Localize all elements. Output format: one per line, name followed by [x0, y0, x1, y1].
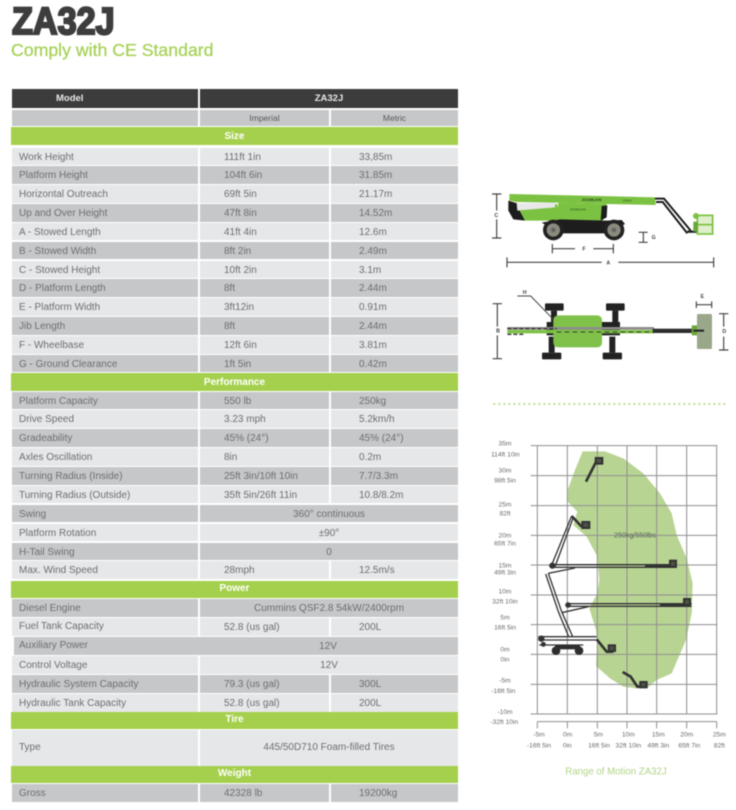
height axis labels: 98ft 5in: [494, 477, 516, 484]
row: max wind speed: 28mph: [224, 565, 255, 576]
height axis labels: 16ft 5in: [494, 625, 516, 632]
row: platform capacity: 550 lb: [224, 396, 251, 406]
dimension letters: side view: A: [606, 261, 610, 267]
height axis labels: -32ft 10in: [490, 719, 519, 726]
row: stowed width: B - Stowed Width: [19, 246, 96, 257]
row: platform capacity: [12, 392, 458, 410]
boom positions: [538, 458, 692, 687]
table header: ZA32J: [200, 89, 458, 108]
height axis labels: -16ft 5in: [491, 688, 516, 695]
band: size: [11, 127, 458, 145]
dimension letters: top view: D: [722, 329, 726, 335]
sub-header imperial: [200, 110, 329, 126]
row: stowed length: 41ft 4in: [224, 227, 257, 238]
boom pose: horizontal at 15m: [548, 561, 677, 573]
reach axis labels: 82ft: [714, 742, 725, 749]
row: hydraulic system capacity: [12, 674, 458, 694]
row: hydraulic tank capacity: 52.8 (us gal): [224, 698, 280, 709]
row: tire type: Type: [19, 742, 41, 753]
row: turning radius inside: Turning Radius (Inside): [19, 471, 123, 482]
row: control voltage: [12, 656, 458, 674]
row: wheelbase: 12ft 6in: [224, 340, 257, 351]
row: turning radius inside: 7.7/3.3m: [359, 471, 398, 482]
row: work height: [12, 148, 458, 165]
row: platform capacity: 250kg: [359, 396, 386, 406]
reach axis labels: 49ft 3in: [647, 742, 670, 749]
title: ZA32J: [12, 1, 115, 43]
dimension marks: side view: [492, 194, 714, 267]
row: stowed width: 8ft 2in: [224, 246, 251, 257]
row: gradeability: [12, 428, 458, 448]
row: turning radius outside: [12, 486, 458, 503]
row: platform length: D - Platform Length: [19, 283, 106, 294]
working range envelope: [568, 451, 693, 688]
row: turning radius inside: 25ft 3in/10ft 10in: [224, 471, 298, 482]
row: hydraulic system capacity: Hydraulic System Capacity: [19, 679, 138, 690]
section: power: [10, 580, 459, 712]
reach axis labels: 65ft 7in: [678, 742, 701, 749]
row: max wind speed: [12, 561, 458, 579]
band: size: Size: [224, 131, 244, 142]
row: hydraulic system capacity: 300L: [359, 679, 381, 690]
dimension letters: side view: C: [494, 213, 498, 219]
row: hydraulic tank capacity: [12, 694, 458, 712]
row: gradeability: Gradeability: [19, 433, 72, 444]
chart grid: [531, 446, 717, 728]
row: h-tail swing: H-Tail Swing: [19, 546, 75, 558]
row: work height: 33,85m: [359, 152, 392, 162]
height axis labels: 49ft 3in: [494, 570, 516, 577]
row: stowed width: [12, 242, 458, 260]
band: performance: [11, 373, 458, 391]
side view of machine: ZOOMLION: [582, 198, 602, 202]
row: stowed height: 10ft 2in: [224, 265, 257, 276]
row: stowed height: C - Stowed Height: [19, 265, 100, 276]
band: power: Power: [219, 583, 250, 594]
row: platform height: 104ft 6in: [224, 170, 262, 181]
row: up and over height: 47ft 8in: [224, 208, 257, 219]
reach axis labels: 20m: [680, 731, 694, 738]
row: diesel engine: Diesel Engine: [19, 603, 81, 614]
row: gross weight: Gross: [19, 788, 46, 799]
height axis labels: 25m: [499, 501, 512, 508]
row: h-tail swing: [12, 542, 458, 560]
row: gradeability: 45% (24°): [359, 433, 404, 444]
sub-header blank cell: [12, 110, 198, 126]
band: performance: Performance: [204, 377, 265, 388]
row: platform length: 2.44m: [359, 283, 387, 294]
reach axis labels: 25m: [713, 731, 726, 738]
reach axis labels: 0m: [563, 731, 573, 738]
row: gross weight: 19200kg: [359, 788, 397, 799]
height axis labels: 10m: [499, 588, 512, 595]
boom pose: maximum height: [586, 458, 602, 482]
row: platform capacity: Platform Capacity: [19, 396, 98, 406]
sub-header imperial: Imperial: [249, 113, 280, 123]
dimension letters: side view: G: [652, 235, 656, 241]
height axis labels: [490, 441, 520, 726]
row: control voltage: 12V: [320, 660, 338, 671]
height axis labels: 32ft 10in: [492, 598, 518, 605]
row: hydraulic tank capacity: Hydraulic Tank Capacity: [19, 698, 126, 709]
row: horizontal outreach: 21.17m: [359, 189, 392, 200]
row: stowed height: [12, 261, 458, 278]
boom pose: up and over: [552, 516, 589, 567]
row: drive speed: Drive Speed: [19, 414, 74, 425]
reach axis labels: 15m: [652, 731, 665, 738]
row: fuel tank capacity: 52.8 (us gal): [224, 622, 280, 633]
row: auxiliary power: 12V: [319, 641, 337, 652]
range of motion chart: [490, 440, 726, 778]
reach axis labels: [527, 731, 726, 749]
side view of machine: ZA32J: [623, 199, 632, 203]
row: fuel tank capacity: Fuel Tank Capacity: [19, 621, 104, 632]
band: tire: [11, 712, 458, 728]
row: tire type: [12, 730, 458, 766]
row: ground clearance: G - Ground Clearance: [19, 359, 117, 370]
subtitle: Comply with CE Standard: [11, 40, 214, 60]
section: performance: [10, 372, 459, 579]
row: fuel tank capacity: [12, 618, 458, 636]
row: diesel engine: [12, 598, 458, 618]
row: platform width: E - Platform Width: [19, 302, 100, 313]
capacity label: 250kg/550lbs: [614, 533, 656, 540]
row: wheelbase: F - Wheelbase: [19, 340, 84, 351]
row: platform length: [12, 278, 458, 298]
row: platform height: 31.85m: [359, 170, 392, 181]
row: platform rotation: ±90°: [319, 528, 339, 539]
row: up and over height: 14.52m: [359, 208, 392, 219]
row: axles oscillation: 8in: [224, 452, 237, 463]
row: diesel engine: Cummins QSF2.8 54kW/2400rpm: [254, 603, 404, 614]
row: axles oscillation: Axles Oscillation: [19, 452, 92, 463]
row: horizontal outreach: Horizontal Outreach: [19, 189, 108, 200]
sub-header metric: Metric: [383, 113, 406, 123]
row: platform rotation: [12, 524, 458, 541]
row: fuel tank capacity: 200L: [359, 622, 381, 633]
height axis labels: 0in: [501, 656, 510, 663]
row: platform height: [12, 166, 458, 184]
reach axis labels: 10m: [622, 731, 635, 738]
boom pose: below ground: [623, 672, 647, 687]
row: horizontal outreach: 69ft 5in: [224, 189, 257, 200]
height axis labels: 114ft 10in: [491, 451, 520, 458]
row: platform rotation: Platform Rotation: [19, 528, 96, 539]
band: tire: Tire: [225, 714, 244, 725]
row: jib length: 8ft: [224, 321, 235, 332]
row: stowed length: 12.6m: [359, 227, 387, 238]
height axis labels: 30m: [499, 467, 512, 474]
row: h-tail swing: 0: [326, 546, 332, 558]
reach axis labels: 5m: [594, 731, 603, 738]
band: weight: [11, 766, 458, 782]
chart caption: Range of Motion ZA32J: [565, 767, 667, 778]
boom pose: horizontal at 10m: [562, 599, 692, 613]
row: gross weight: 42328 lb: [224, 788, 262, 799]
row: gradeability: 45% (24°): [224, 433, 269, 444]
row: auxiliary power: Auxiliary Power: [19, 640, 88, 651]
row: platform width: [12, 298, 458, 316]
lower arm linkage: [546, 573, 573, 637]
height axis labels: 5m: [500, 615, 510, 622]
row: ground clearance: 1ft 5in: [224, 359, 251, 370]
section: tire: [10, 711, 459, 766]
dimension marks: top view: [493, 296, 728, 359]
height axis labels: 35m: [499, 441, 512, 448]
boom pose: stowed with jib down: [538, 636, 615, 652]
row: axles oscillation: [12, 448, 458, 466]
row: turning radius outside: 10.8/8.2m: [359, 490, 403, 501]
row: drive speed: 3.23 mph: [224, 414, 266, 425]
dimension letters: top view: [496, 290, 726, 335]
row: hydraulic system capacity: 79.3 (us gal): [224, 679, 280, 690]
row: platform width: 0.91m: [359, 302, 387, 313]
row: platform width: 3ft12in: [224, 302, 254, 313]
side view of machine: ZOOMLION: [570, 208, 586, 212]
dimension letters: side view: F: [582, 247, 586, 253]
row: tire type: 445/50D710 Foam-filled Tires: [263, 742, 395, 753]
machine chassis: [552, 645, 583, 655]
height axis labels: -10m: [497, 709, 513, 716]
row: auxiliary power: [14, 636, 458, 656]
height axis labels: -5m: [499, 677, 511, 684]
row: turning radius outside: Turning Radius (Outside): [19, 490, 130, 501]
reach axis labels: -16ft 5in: [527, 742, 551, 749]
machine dimension drawings: [491, 192, 729, 406]
row: jib length: [12, 316, 458, 336]
row: work height: Work Height: [19, 152, 74, 162]
row: hydraulic tank capacity: 200L: [359, 698, 381, 709]
height axis labels: 20m: [499, 532, 512, 539]
dimension letters: top view: E: [701, 294, 705, 300]
row: control voltage: Control Voltage: [19, 660, 87, 671]
row: horizontal outreach: [12, 185, 458, 203]
specification table: [10, 88, 459, 802]
band: weight: Weight: [218, 768, 251, 779]
row: axles oscillation: 0.2m: [359, 452, 381, 463]
row: platform height: Platform Height: [19, 170, 88, 181]
dimension letters: side view: [494, 213, 656, 267]
dimension letters: top view: B: [496, 329, 500, 335]
reach axis labels: 16ft 5in: [588, 742, 610, 749]
sub-header metric: [331, 110, 458, 126]
row: stowed length: [12, 223, 458, 240]
row: wheelbase: 3.81m: [359, 340, 387, 351]
table header: ZA32J: ZA32J: [315, 93, 343, 104]
section: size: [10, 126, 459, 372]
row: platform length: 8ft: [224, 283, 235, 294]
row: up and over height: [12, 204, 458, 222]
row: wheelbase: [12, 336, 458, 354]
row: turning radius outside: 35ft 5in/26ft 11in: [224, 490, 297, 501]
row: stowed width: 2.49m: [359, 246, 387, 257]
dimension letters: top view: H: [523, 290, 527, 296]
row: drive speed: 5.2km/h: [359, 414, 395, 425]
dotted divider: [493, 402, 728, 406]
reach axis labels: 32ft 10in: [616, 742, 641, 749]
row: drive speed: [12, 410, 458, 428]
row: work height: 111ft 1in: [224, 152, 261, 162]
band: power: [11, 581, 458, 598]
row: stowed length: A - Stowed Length: [19, 227, 101, 238]
row: gross weight: [12, 784, 458, 802]
row: swing: Swing: [19, 509, 46, 520]
height axis labels: 0m: [500, 646, 510, 653]
row: ground clearance: 0.42m: [359, 359, 387, 370]
reach axis labels: -5m: [533, 731, 545, 738]
reach axis labels: 0in: [563, 742, 572, 749]
section: weight: [10, 765, 459, 802]
top view of machine: [507, 303, 712, 359]
height axis labels: 65ft 7in: [494, 541, 516, 548]
height axis labels: 82ft: [499, 511, 511, 518]
row: max wind speed: 12.5m/s: [359, 565, 395, 576]
row: jib length: Jib Length: [19, 321, 65, 332]
row: swing: [12, 504, 458, 522]
table header: model: [12, 89, 198, 108]
row: stowed height: 3.1m: [359, 265, 381, 276]
row: swing: 360° continuous: [293, 509, 365, 520]
row: up and over height: Up and Over Height: [19, 208, 107, 219]
height axis labels: 15m: [499, 562, 512, 569]
row: jib length: 2.44m: [359, 321, 387, 332]
side view of machine: [508, 194, 713, 240]
row: turning radius inside: [12, 466, 458, 486]
row: ground clearance: [12, 354, 458, 372]
table header: model: Model: [56, 93, 83, 104]
row: max wind speed: Max. Wind Speed: [19, 565, 98, 576]
